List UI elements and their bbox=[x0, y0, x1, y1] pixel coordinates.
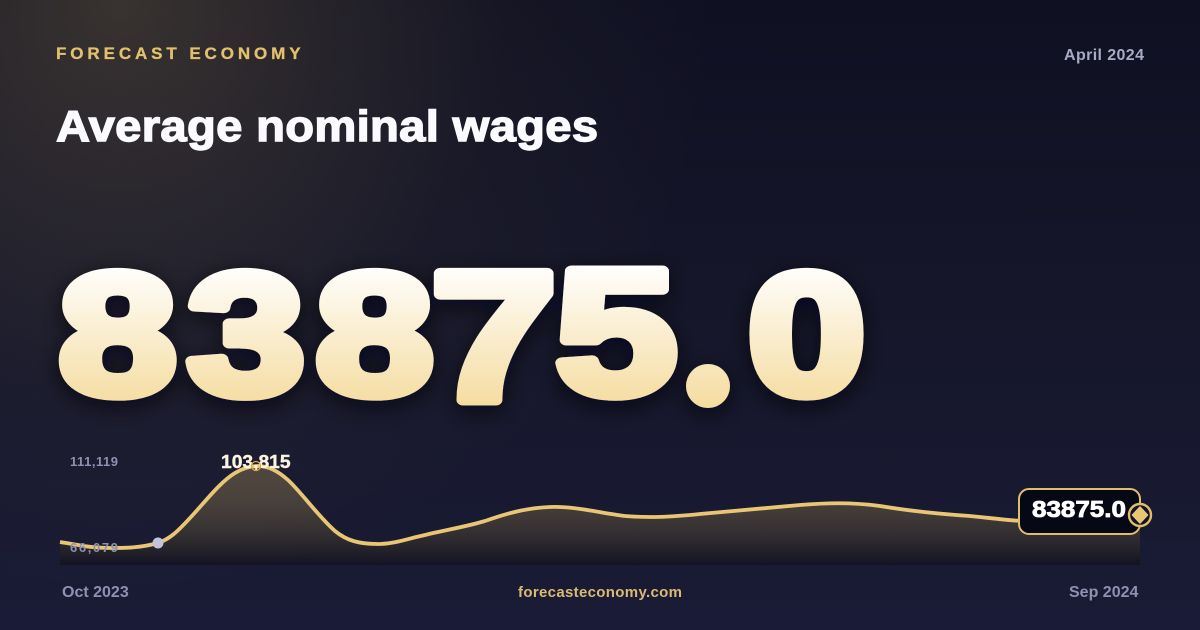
x axis start label: Oct 2023 bbox=[62, 584, 129, 601]
big value: 83875 .0 bbox=[59, 233, 865, 439]
chart line bbox=[60, 466, 1022, 548]
axis min label: 66,079 bbox=[70, 540, 118, 555]
current value marker bbox=[1129, 504, 1151, 526]
title: Average nominal wages bbox=[56, 101, 598, 151]
source link: forecasteconomy.com bbox=[518, 584, 682, 601]
minimum marker bbox=[152, 538, 164, 548]
peak marker bbox=[252, 462, 260, 470]
current value callout bbox=[1019, 489, 1140, 534]
decimal point bbox=[686, 364, 730, 408]
chart bbox=[60, 452, 1151, 565]
axis max label: 111,119 bbox=[70, 454, 118, 469]
current value callout: 83875.0 bbox=[1032, 497, 1126, 523]
peak label: 103,815 bbox=[221, 452, 291, 472]
brand label: FORECAST ECONOMY bbox=[56, 44, 304, 63]
date label: April 2024 bbox=[1064, 47, 1144, 64]
x axis end label: Sep 2024 bbox=[1069, 584, 1138, 601]
chart area fill bbox=[60, 466, 1140, 565]
